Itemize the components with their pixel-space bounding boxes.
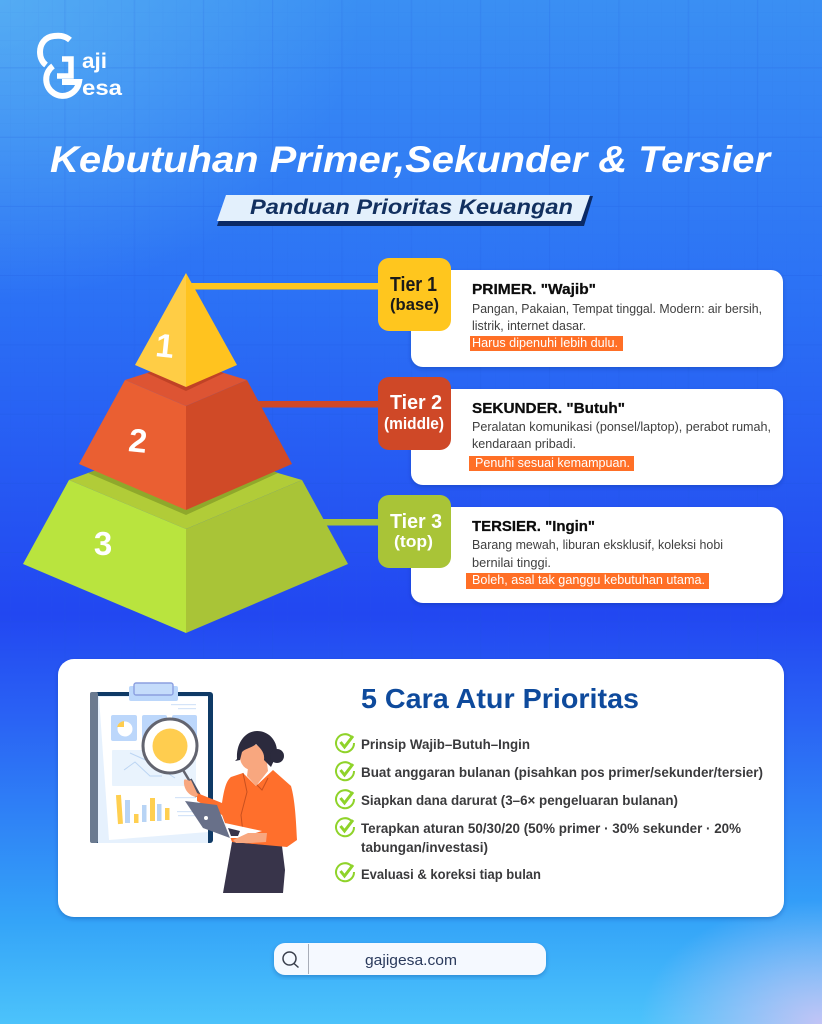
pyramid tier 1: [135, 273, 237, 387]
item 4: tabungan/investasi): [361, 840, 488, 855]
tier 2 badge: (middle): [384, 414, 444, 433]
card: primer: [411, 270, 783, 367]
card: sekunder: Peralatan komunikasi (ponsel/laptop), perabot rumah,: [472, 419, 771, 434]
item 5: [336, 863, 541, 882]
item 4: [336, 818, 741, 855]
magnifier: [143, 719, 198, 796]
panel heading: 5 Cara Atur Prioritas: [361, 683, 639, 714]
card: primer: Harus dipenuhi lebih dulu.: [472, 335, 618, 350]
card: tersier: TERSIER. "Ingin": [472, 519, 595, 535]
item 2: Buat anggaran bulanan (pisahkan pos primer/sekunder/tersier): [361, 765, 763, 780]
card: sekunder: SEKUNDER. "Butuh": [472, 401, 625, 417]
tier 2 badge: Tier 2: [390, 392, 442, 414]
card: sekunder: kendaraan pribadi.: [472, 436, 576, 451]
search bar: [274, 943, 546, 975]
card: sekunder: [411, 389, 783, 485]
icon: magnifier: [283, 952, 298, 968]
card: tersier: bernilai tinggi.: [472, 555, 551, 570]
item 4: Terapkan aturan 50/30/20 (50% primer · 30% sekunder · 20%: [361, 821, 741, 836]
woman: [184, 731, 297, 893]
tier 1 badge: [378, 258, 451, 331]
subtitle ribbon: Panduan Prioritas Keuangan: [250, 196, 573, 219]
card: tersier: Boleh, asal tak ganggu kebutuhan utama.: [472, 572, 705, 587]
tier 2 badge: [378, 377, 451, 450]
panel: 5 cara atur prioritas: [58, 659, 784, 917]
item 1: Prinsip Wajib–Butuh–Ingin: [361, 737, 530, 752]
tier 3 badge: Tier 3: [390, 511, 442, 533]
title: Kebutuhan Primer,Sekunder & Tersier: [50, 139, 773, 180]
tier 1 badge: (base): [390, 295, 439, 314]
clipboard: [90, 683, 213, 843]
card: tersier: Barang mewah, liburan eksklusif, koleksi hobi: [472, 537, 723, 552]
search bar: gajigesa.com: [365, 952, 457, 969]
card: primer: Pangan, Pakaian, Tempat tinggal. Modern: air bersih,: [472, 301, 762, 316]
card: primer: listrik, internet dasar.: [472, 318, 586, 333]
tier 1 badge: Tier 1: [390, 274, 437, 296]
logo: Gaji Gesa: [40, 36, 122, 100]
item 3: Siapkan dana darurat (3–6× pengeluaran bulanan): [361, 793, 678, 808]
connector lines: [190, 283, 382, 526]
item 5: Evaluasi & koreksi tiap bulan: [361, 867, 541, 882]
card: sekunder: Penuhi sesuai kemampuan.: [475, 455, 630, 470]
pyramid tier 3: 3: [94, 525, 112, 562]
tier 3 badge: (top): [394, 532, 433, 551]
pyramid tier 3: [23, 440, 348, 633]
card: primer: PRIMER. "Wajib": [472, 282, 596, 298]
checklist: [336, 734, 763, 882]
card: tersier: [411, 507, 783, 603]
subtitle ribbon: [217, 195, 593, 226]
tier 3 badge: [378, 495, 451, 568]
pyramid tier 2: [79, 360, 292, 510]
pyramid: [23, 273, 348, 633]
pyramid tier 2: 2: [127, 421, 149, 460]
logo: Gaji Gesa: aji: [82, 50, 107, 73]
pyramid tier 1: 1: [154, 326, 176, 365]
illustration: clipboard and woman: [90, 683, 297, 893]
logo: Gaji Gesa: esa: [82, 77, 122, 100]
